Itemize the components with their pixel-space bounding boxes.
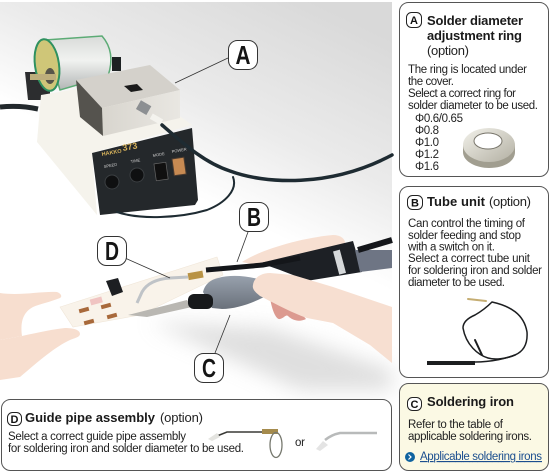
description A: The ring is located under bbox=[408, 64, 527, 76]
icon: tube unit bbox=[427, 299, 527, 365]
callout D: D bbox=[105, 236, 119, 266]
heading A: Solder diameter bbox=[427, 13, 523, 28]
description D: for soldering iron and solder diameter to be used. bbox=[8, 443, 244, 455]
front panel labels: HAKKO bbox=[101, 148, 123, 158]
icon: adjustment ring bbox=[463, 128, 515, 168]
main product photo bbox=[0, 2, 392, 395]
description B: for soldering iron and solder bbox=[408, 265, 542, 277]
front panel labels: SPEED bbox=[103, 162, 118, 169]
badge C: C bbox=[411, 399, 419, 411]
right hand bbox=[242, 235, 345, 321]
front panel labels: POWER bbox=[171, 146, 187, 154]
badge B bbox=[408, 196, 422, 210]
description A: the cover. bbox=[408, 76, 454, 88]
table shadow bbox=[150, 322, 392, 390]
heading B: (option) bbox=[489, 194, 531, 209]
callout D bbox=[98, 236, 126, 266]
callout C bbox=[194, 353, 224, 383]
soldering iron tip bbox=[128, 300, 192, 317]
callout B: B bbox=[247, 202, 261, 232]
description D bbox=[8, 431, 244, 455]
badge D bbox=[8, 412, 22, 426]
badge C bbox=[408, 398, 422, 411]
front panel labels: TIME bbox=[130, 157, 141, 164]
heading C: Soldering iron bbox=[427, 394, 514, 409]
description B: Select a correct tube unit bbox=[408, 253, 531, 265]
description C: applicable soldering irons. bbox=[408, 431, 532, 443]
panel: B tube unit bbox=[400, 186, 548, 378]
or label: or bbox=[295, 437, 305, 449]
callout B bbox=[240, 202, 268, 232]
callout A bbox=[228, 40, 258, 70]
solder spool bbox=[25, 36, 121, 100]
callout A: A bbox=[236, 40, 251, 70]
description B: with a switch on it. bbox=[407, 242, 495, 254]
front panel labels: 373 bbox=[122, 141, 138, 153]
panel: D guide pipe assembly bbox=[2, 400, 392, 470]
badge A bbox=[406, 12, 422, 28]
heading A bbox=[427, 13, 523, 58]
diameter list: Φ0.8 bbox=[415, 125, 439, 137]
left hand bbox=[0, 292, 80, 380]
description A: solder diameter to be used. bbox=[408, 100, 538, 112]
description B: solder feeding and stop bbox=[408, 230, 521, 242]
left cable bbox=[0, 106, 38, 109]
heading B: Tube unit bbox=[427, 194, 486, 209]
diameter list: Φ1.0 bbox=[415, 137, 439, 149]
diameter list: Φ1.6 bbox=[415, 161, 439, 173]
badge B: B bbox=[411, 198, 419, 210]
printed circuit board bbox=[60, 257, 223, 327]
heading D: Guide pipe assembly bbox=[25, 410, 156, 425]
description B bbox=[407, 218, 542, 289]
description C: Refer to the table of bbox=[408, 419, 504, 431]
badge D: D bbox=[11, 414, 19, 426]
description D: Select a correct guide pipe assembly bbox=[8, 431, 186, 443]
callout C: C bbox=[202, 353, 216, 383]
diameter list bbox=[415, 113, 463, 173]
control unit body bbox=[37, 65, 198, 215]
guide pipe bbox=[137, 271, 204, 303]
panel: A solder diameter adjustment ring bbox=[400, 2, 548, 176]
badge A: A bbox=[410, 15, 418, 27]
link: applicable soldering irons: Applicable soldering irons bbox=[420, 451, 542, 463]
heading A: adjustment ring bbox=[427, 28, 522, 43]
heading A: (option) bbox=[427, 43, 469, 58]
palm over grip bbox=[253, 273, 392, 363]
front panel labels: MODE bbox=[152, 151, 165, 158]
heading B bbox=[427, 194, 531, 209]
description B: diameter to be used. bbox=[408, 277, 505, 289]
diameter list: Φ0.6/0.65 bbox=[415, 113, 463, 125]
panel: C soldering iron bbox=[400, 384, 548, 470]
description A bbox=[408, 64, 538, 112]
front panel labels bbox=[101, 141, 187, 169]
description C bbox=[408, 419, 532, 443]
diameter list: Φ1.2 bbox=[415, 149, 439, 161]
callout lines bbox=[125, 58, 248, 353]
metal cover bbox=[76, 65, 180, 136]
power cables bbox=[117, 125, 392, 217]
description A: Select a correct ring for bbox=[408, 88, 516, 100]
tube unit pipe bbox=[206, 258, 300, 270]
description B: Can control the timing of bbox=[408, 218, 526, 230]
soldering iron grip bbox=[188, 240, 392, 309]
icon: guide pipe with ring bbox=[208, 429, 282, 458]
icon: bare guide pipe bbox=[316, 433, 377, 451]
heading D: (option) bbox=[160, 410, 203, 425]
